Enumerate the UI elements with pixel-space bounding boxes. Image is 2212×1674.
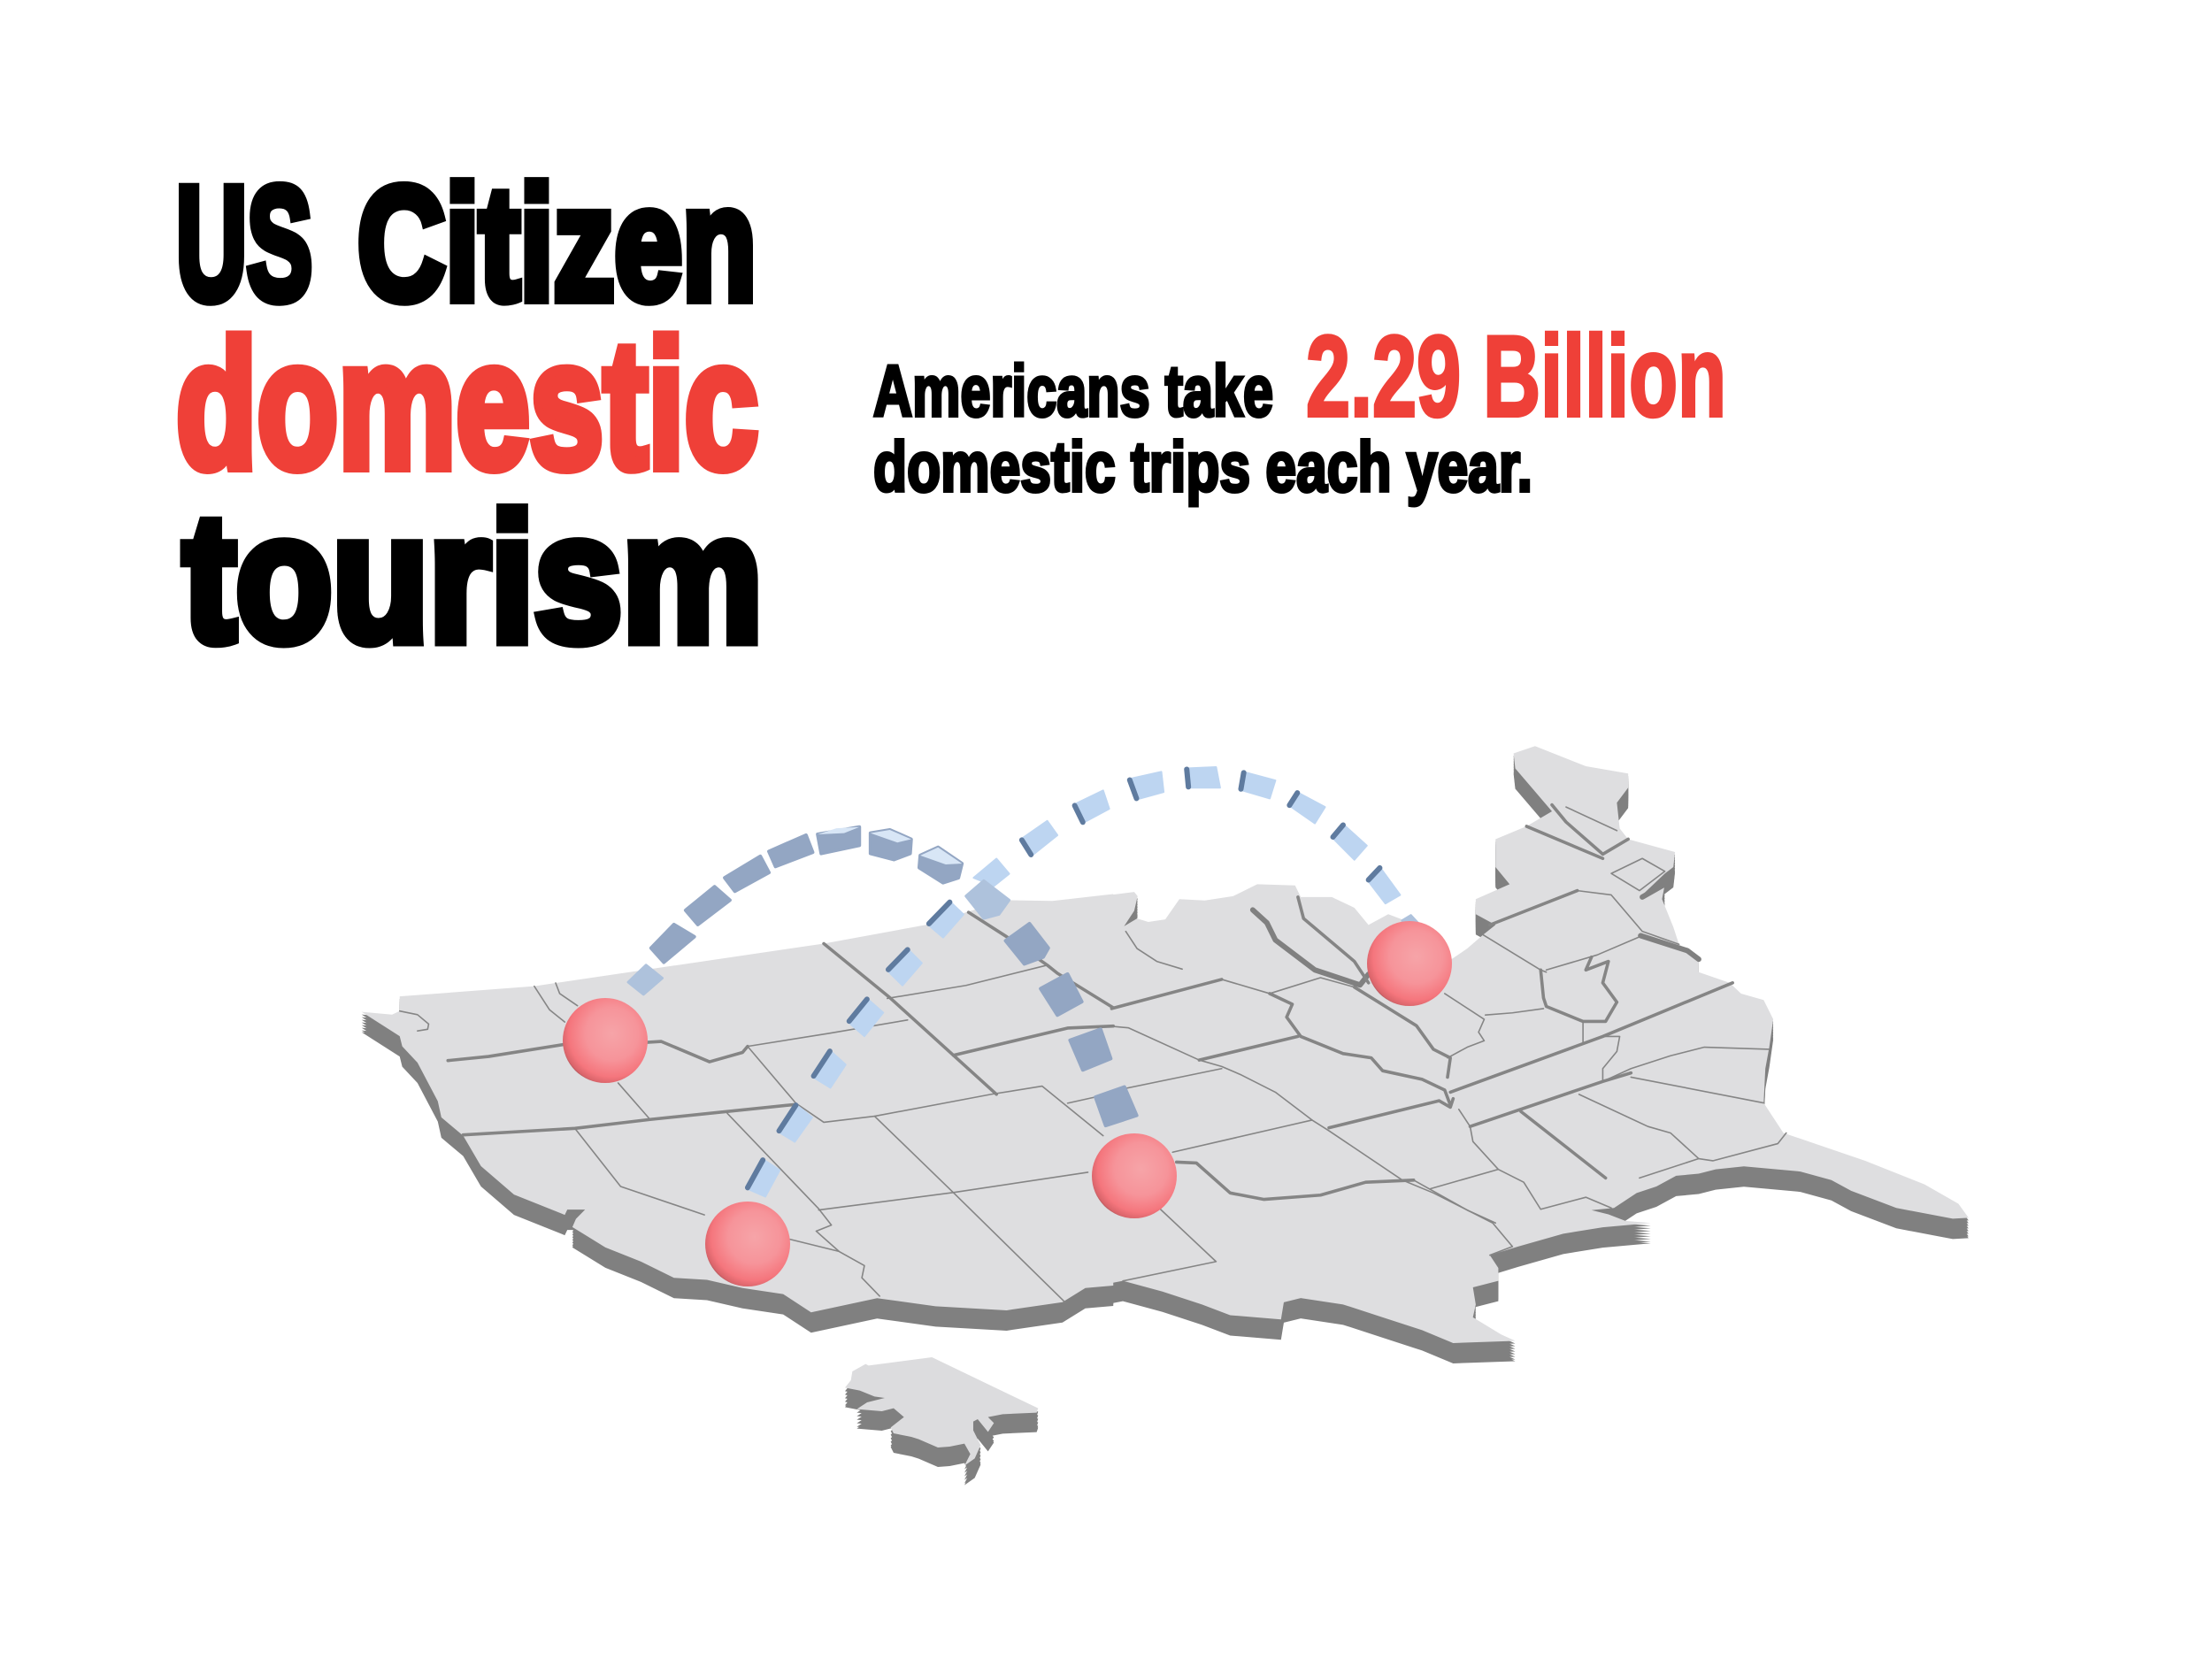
title line: US Citizen	[176, 153, 757, 334]
flight arc: Pacific Northwest to Southern Plains, descending	[966, 880, 1137, 1125]
location marker: Southern California	[705, 1202, 790, 1286]
map top surface	[362, 746, 1969, 1343]
flight arc: Pacific Northwest to Southern Plains, ascending	[628, 827, 962, 994]
Alaska extrusion side	[845, 1361, 1038, 1486]
western state borders	[400, 912, 1113, 1302]
3D map of the contiguous United States	[362, 746, 1969, 1363]
title	[176, 153, 763, 680]
text: domestic trips each year.: domestic trips each year.	[873, 427, 1532, 506]
map extrusion side	[362, 749, 1969, 1363]
text: Americans take: Americans take	[873, 351, 1273, 432]
title line: US Citizen: US	[176, 153, 312, 334]
flight arc: Southern California to Great Lakes	[747, 767, 1417, 1196]
location marker: Southern Plains	[1092, 1133, 1177, 1218]
map of Alaska	[845, 1357, 1038, 1486]
location marker: Great Lakes	[1367, 921, 1452, 1006]
Alaska top surface	[845, 1357, 1038, 1466]
statistic text block	[873, 311, 1726, 506]
title line: tourism: tourism	[183, 477, 763, 680]
title line: US Citizen: Citizen	[357, 153, 757, 334]
title line: domestic: domestic	[176, 303, 758, 506]
highlighted figure: 2.29 Billion: 2.29 Billion	[1306, 311, 1726, 441]
location marker: Pacific Northwest	[563, 998, 648, 1083]
central and eastern state borders	[1106, 805, 1786, 1281]
